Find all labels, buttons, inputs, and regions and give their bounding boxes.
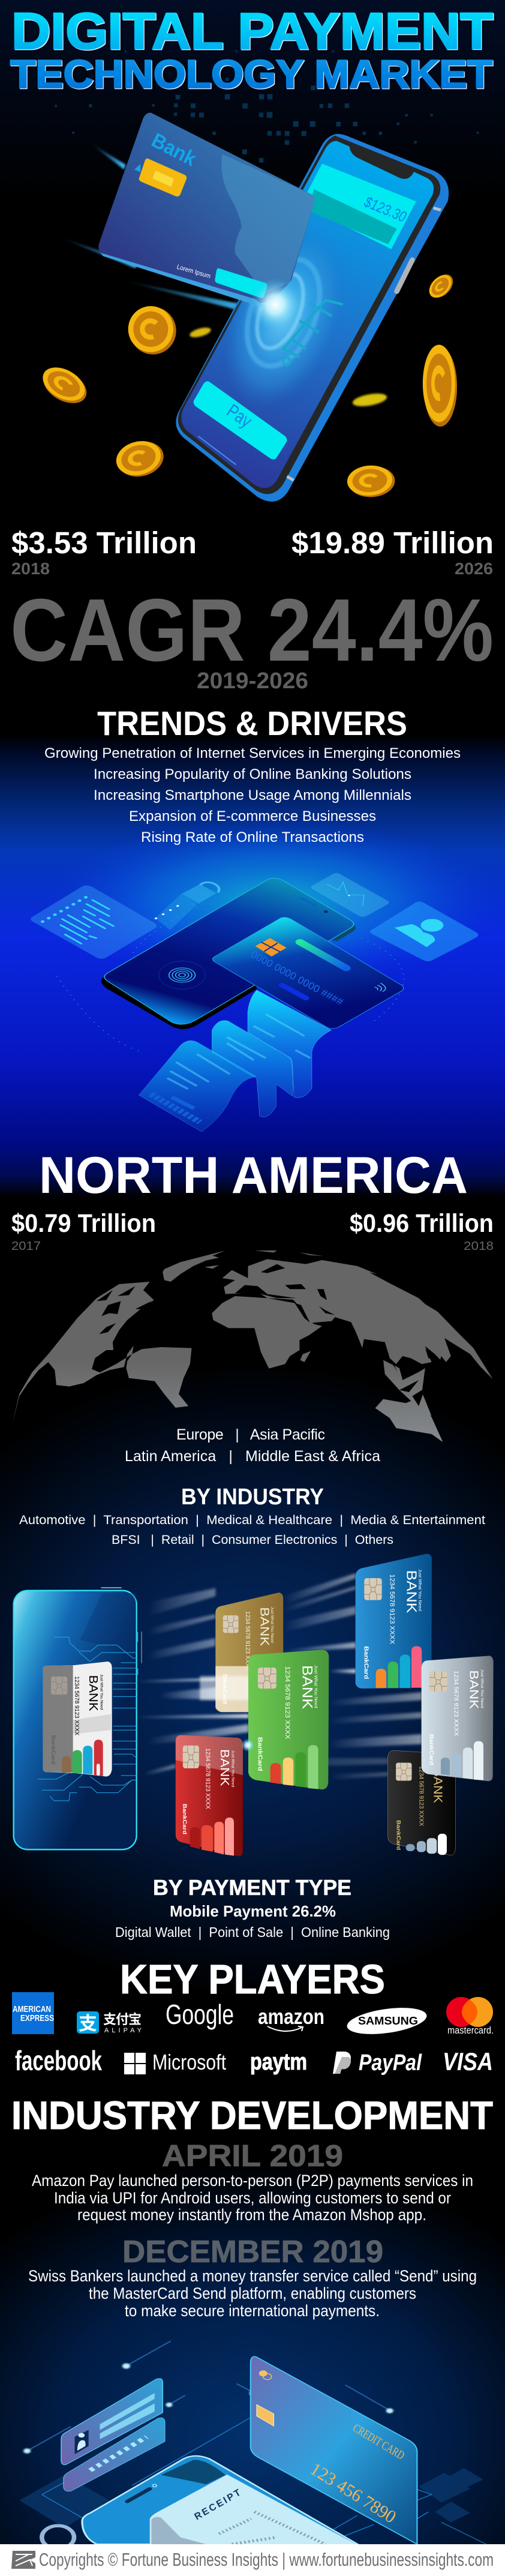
illustration: cards flying out of phone (14, 1554, 494, 1857)
text block: drivers list: Expansion of E-commerce Businesses (129, 808, 376, 824)
icon: lens flare (241, 1738, 255, 1752)
icon: gold coins (37, 269, 458, 499)
card: blue (356, 1554, 432, 1689)
panel: user profile (370, 901, 478, 961)
card: black: BANK (431, 1768, 444, 1804)
card: red: BankCard (182, 1804, 188, 1834)
card: gold: BankCard (222, 1674, 228, 1704)
text: card labels: RECEIPT (193, 2488, 243, 2522)
stat: market size 2026: 2026 (455, 559, 493, 578)
button: Pay (194, 381, 287, 460)
development: december 2019: to make secure international payments. (125, 2302, 380, 2320)
card: black: 1234 5678 9123 XXXX (417, 1766, 424, 1827)
grid floor (19, 2417, 486, 2544)
stat: north america 2018 (350, 1209, 494, 1253)
text block: drivers list: Rising Rate of Online Transactions (141, 829, 364, 845)
logo: paypal (333, 2050, 422, 2076)
card: green: Just What You Need (314, 1665, 318, 1708)
logo: american express: AMERICAN (13, 2005, 51, 2014)
development: april 2019: request money instantly from the Amazon Mshop app. (77, 2206, 426, 2224)
stat: north america 2018: 2018 (464, 1240, 494, 1253)
logo: american express (12, 1992, 54, 2034)
text block: payment types: Digital Wallet | Point of Sale | Online Banking (115, 1924, 390, 1940)
footer bar (0, 2544, 505, 2576)
card: blue: BankCard (362, 1646, 369, 1679)
title (10, 3, 493, 96)
logo: visa: VISA (443, 2047, 493, 2076)
stat: north america 2017: $0.79 Trillion (11, 1209, 156, 1238)
text block: industries: Automotive | Transportation | Medical & Healthcare | Media & Entertainment (19, 1513, 485, 1527)
card in phone: Just What You Need (100, 1674, 104, 1710)
icon: fingerprint (159, 961, 205, 989)
stat: market size 2026: $19.89 Trillion (291, 526, 494, 560)
motion streaks (134, 1573, 422, 1780)
heading: by payment type: BY PAYMENT TYPE (153, 1875, 351, 1900)
logo: alipay (77, 2008, 142, 2035)
text block: drivers list: Increasing Popularity of Online Banking Solutions (94, 766, 411, 782)
card: green: 1234 5678 9123 XXXX (284, 1666, 291, 1740)
logos: key players (12, 1992, 494, 2076)
development: april 2019: India via UPI for Android users, allowing customers to send or (54, 2189, 451, 2207)
logo: alipay: ALIPAY (104, 2027, 142, 2034)
logo: american express: EXPRESS (20, 2014, 54, 2023)
card: red (176, 1735, 243, 1857)
text: card number: 0000 0000 0000 #### (249, 949, 345, 1008)
card: silver: BankCard (429, 1734, 435, 1765)
logo: paypal: PayPal (359, 2050, 422, 2076)
illustration: isometric credit card, login and receipt (19, 2341, 486, 2549)
heading: trends and drivers: TRENDS & DRIVERS (97, 704, 407, 743)
card: blue: BANK (404, 1570, 420, 1613)
text block: other regions (125, 1426, 380, 1465)
development: december 2019: the MasterCard Send platform, enabling customers (89, 2284, 416, 2302)
heading: by industry: BY INDUSTRY (181, 1485, 324, 1510)
card: red: BANK (218, 1749, 232, 1786)
logo: facebook: facebook (15, 2045, 102, 2076)
card: gold: Just What You Need (270, 1607, 274, 1643)
stat: CAGR: 2019-2026 (197, 668, 308, 694)
icon: fortune business insights logo (11, 2551, 35, 2569)
heading: north america: NORTH AMERICA (39, 1147, 468, 1204)
icon: payment swirl and cart (199, 208, 371, 427)
stat: market size 2018: $3.53 Trillion (11, 526, 197, 560)
logo: samsung: SAMSUNG (358, 2015, 418, 2027)
text block: payment types: Mobile Payment 26.2% (170, 1902, 336, 1920)
icon: circuit lines (38, 1637, 137, 1801)
card in phone: 1234 5678 9123 XXXX (73, 1676, 80, 1736)
panel: document (31, 886, 157, 959)
text: card labels: 123 456 7890 (306, 2459, 399, 2527)
stat: north america 2017: 2017 (11, 1240, 41, 1253)
text: card labels (193, 2421, 407, 2527)
card: blue: Just What You Need (417, 1569, 422, 1611)
map: seas and lakes (97, 1264, 454, 1406)
panel: chart (311, 873, 389, 917)
card: red: Just What You Need (231, 1750, 235, 1788)
card: green (248, 1650, 329, 1789)
development: april 2019: APRIL 2019 (162, 2139, 343, 2173)
logo: alipay: 支付宝 (103, 2009, 142, 2028)
card: gold: 1234 5678 9123 XXXX (244, 1611, 251, 1671)
phone (176, 134, 449, 502)
card: gold (200, 1593, 283, 1712)
logo: mastercard: mastercard. (447, 2025, 494, 2036)
hero illustration: phone, bank card and coins (37, 113, 458, 502)
logo: microsoft: Microsoft (152, 2050, 226, 2074)
logo: mastercard (446, 1997, 494, 2036)
logo: paytm: paytm (250, 2049, 307, 2075)
text block: drivers list: Growing Penetration of Internet Services in Emerging Economies (44, 745, 461, 761)
stat: market size 2018 (11, 526, 197, 578)
receipt ribbon (139, 990, 331, 1132)
login panels (61, 2379, 165, 2491)
card: gold: BANK (258, 1607, 272, 1647)
world map (12, 1250, 493, 1442)
logo: alipay: 支 (79, 2008, 97, 2035)
card: silver: BANK (467, 1670, 480, 1710)
hero: pixel grid backdrop (55, 50, 479, 163)
icon: speed streaks (58, 143, 251, 313)
card: black (388, 1750, 455, 1855)
card: black: BankCard (396, 1820, 402, 1851)
stat: market size 2026 (291, 526, 494, 578)
credit card (213, 917, 404, 1028)
logo: samsung (345, 2004, 428, 2038)
card in phone: BANK (86, 1675, 100, 1711)
card: silver: Just What You Need (480, 1669, 484, 1708)
credit card (251, 2356, 417, 2544)
card: green: BANK (299, 1665, 315, 1709)
card: green: BankCard (257, 1737, 263, 1771)
text block: payment types (115, 1902, 390, 1940)
bank card (98, 113, 314, 308)
text block: other regions: Europe | Asia Pacific (176, 1426, 325, 1443)
logo: microsoft (124, 2050, 226, 2074)
comets (23, 2341, 402, 2497)
text block: drivers list: Increasing Smartphone Usage Among Millennials (94, 787, 411, 803)
card: silver (422, 1656, 494, 1781)
bank card: Lorem Ipsum (176, 263, 211, 280)
logo: amazon: amazon (258, 2004, 324, 2029)
stat: north america 2017 (11, 1209, 156, 1253)
phone outline (14, 1588, 142, 1849)
panel: balance: $123.30 (362, 193, 408, 226)
panel: balance (301, 164, 416, 249)
card: red: 1234 5678 9123 XXXX (204, 1748, 211, 1809)
heading: key players: KEY PLAYERS (120, 1956, 385, 2002)
card: blue: 1234 5678 9123 XXXX (389, 1574, 396, 1645)
text block: industries (19, 1513, 485, 1547)
stat: market size 2018: 2018 (11, 559, 50, 578)
development: december 2019 (28, 2235, 477, 2320)
text block: other regions: Latin America | Middle East & Africa (125, 1448, 380, 1465)
icon: padlock (155, 882, 219, 930)
development: april 2019 (32, 2139, 473, 2224)
text block: industries: BFSI | Retail | Consumer Electronics | Others (112, 1533, 393, 1547)
text: card labels: CREDIT CARD (350, 2421, 407, 2463)
icon: contact glow (250, 278, 301, 331)
phone (101, 878, 356, 1029)
text block: drivers list (44, 745, 461, 845)
illustration: phone with card and receipt (31, 818, 501, 1132)
card in phone (43, 1662, 112, 1777)
development: december 2019: DECEMBER 2019 (122, 2235, 383, 2269)
title: DIGITAL PAYMENT (11, 3, 493, 60)
phone with receipt (42, 2456, 357, 2549)
stat: north america 2018: $0.96 Trillion (350, 1209, 494, 1238)
logo: google: Google (166, 1999, 234, 2030)
title: TECHNOLOGY MARKET (10, 52, 492, 96)
card in phone: BankCard (50, 1735, 56, 1765)
card: silver: 1234 5678 9123 XXXX (452, 1671, 459, 1737)
button: Pay: Pay (223, 400, 255, 432)
bank card: Bank (148, 129, 200, 171)
